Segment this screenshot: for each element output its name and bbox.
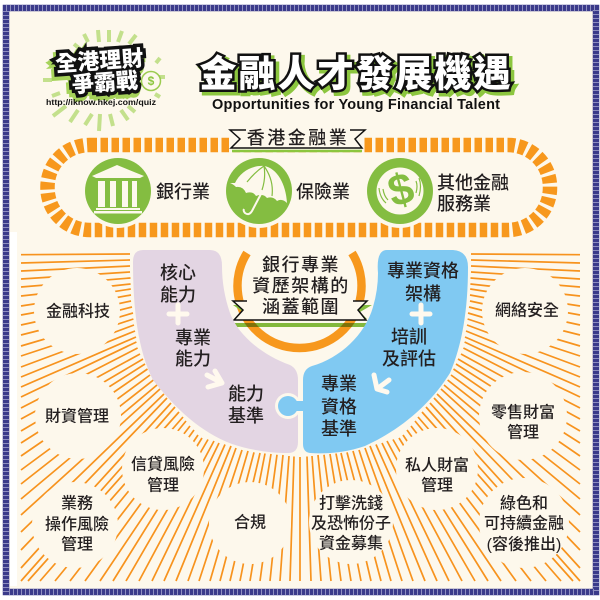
text: qualification framework: 架構 <box>405 284 441 304</box>
topic: AML and CFT <box>311 494 391 552</box>
icon: plus <box>412 305 430 323</box>
text: qualification framework <box>387 261 459 304</box>
topic: AML and CFT: 及恐怖份子 <box>311 514 391 532</box>
text: qualification framework: 專業資格 <box>387 261 459 281</box>
central heading: 涵蓋範圍 <box>262 297 340 317</box>
topic: credit risk <box>131 456 195 494</box>
text: training and assessment <box>382 327 436 369</box>
logo title <box>53 45 146 102</box>
topic: private wealth: 私人財富 <box>405 456 469 474</box>
sunburst rays <box>21 254 580 581</box>
central orange arc <box>238 253 362 348</box>
text: professional competency: 專業 <box>175 328 211 348</box>
topic circles backdrop <box>32 268 569 568</box>
icon: dollar <box>363 154 437 228</box>
subtitle: Opportunities for Young Financial Talent <box>212 97 500 113</box>
topic: green finance: 綠色和 <box>500 494 548 512</box>
topic: green finance <box>484 494 564 554</box>
panel: qualification <box>275 250 468 453</box>
topic: compliance: 合規 <box>234 514 266 532</box>
topic: operational risk: 管理 <box>61 534 93 554</box>
text: training and assessment: 及評估 <box>382 349 436 369</box>
logo bulb with dollar: $ <box>148 74 155 88</box>
text: professional competency <box>175 328 211 369</box>
logo title: 全港理財 <box>55 45 144 77</box>
banner: Hong Kong financial industry <box>230 126 365 151</box>
central ribbon <box>233 301 372 327</box>
arrow <box>207 371 222 387</box>
title: 金融人才發展機遇 <box>200 54 510 94</box>
orange dashed pill <box>48 145 550 230</box>
topic: AML and CFT: 資金募集 <box>319 534 383 552</box>
central heading: 銀行專業 <box>262 255 340 275</box>
logo title: 全港理財 <box>55 45 144 77</box>
topic: cybersecurity: 網絡安全 <box>495 300 559 320</box>
topic: retail wealth <box>491 402 555 442</box>
label: other financial services <box>437 173 509 214</box>
text: qualification standards <box>321 374 357 439</box>
label: other financial services: 其他金融 <box>437 173 509 193</box>
banner: Hong Kong financial industry: 香港金融業 <box>247 128 349 148</box>
logo: quiz badge <box>43 30 165 131</box>
logo sun rays <box>43 30 165 131</box>
central heading: 資歷架構的 <box>252 276 350 296</box>
label: banking: 銀行業 <box>156 182 210 202</box>
topic: operational risk <box>45 494 109 554</box>
logo title: 爭霸戰 <box>69 71 137 101</box>
topic: private wealth <box>405 456 469 494</box>
logo title: 全港理財 <box>53 49 142 80</box>
text: qualification standards: 專業 <box>321 374 357 394</box>
puzzle knob <box>275 393 304 419</box>
text: qualification standards: 資格 <box>321 397 357 417</box>
icon: bank <box>81 154 155 228</box>
topic: green finance: 可持續金融 <box>484 514 564 532</box>
topic: treasury: 財資管理 <box>45 406 109 426</box>
text: core competency: 能力 <box>160 285 196 305</box>
topic: retail wealth: 管理 <box>507 422 539 442</box>
text: core competency <box>160 263 196 305</box>
central heading <box>252 255 350 317</box>
icon: dollar: $ <box>383 163 419 217</box>
label: insurance: 保險業 <box>296 182 350 202</box>
text: competency standards: 能力 <box>228 384 264 404</box>
topic: green finance: (容後推出) <box>487 534 561 554</box>
text: training and assessment: 培訓 <box>391 327 427 347</box>
icon: umbrella <box>222 154 296 228</box>
title: 金融人才發展機遇 <box>200 54 510 94</box>
logo title: 爭霸戰 <box>71 68 139 97</box>
logo title: 爭霸戰 <box>71 68 139 97</box>
text: competency standards: 基準 <box>228 406 264 426</box>
icon: plus <box>169 305 187 323</box>
white strip at lower left <box>10 232 17 586</box>
text: competency standards <box>228 384 264 426</box>
topic: fintech: 金融科技 <box>46 302 110 320</box>
arrow <box>374 375 389 392</box>
logo url: http://iknow.hkej.com/quiz <box>46 97 156 107</box>
topic: operational risk: 業務 <box>61 494 93 512</box>
topic: credit risk: 管理 <box>147 476 179 494</box>
topic: operational risk: 操作風險 <box>45 516 109 534</box>
topic: private wealth: 管理 <box>421 476 453 494</box>
text: core competency: 核心 <box>160 263 196 283</box>
title: 金融人才發展機遇 <box>202 56 514 98</box>
label: other financial services: 服務業 <box>437 194 491 214</box>
text: qualification standards: 基準 <box>321 419 357 439</box>
panel: competency <box>133 250 298 453</box>
topic: AML and CFT: 打擊洗錢 <box>319 494 383 512</box>
topic: retail wealth: 零售財富 <box>491 402 555 422</box>
topic: credit risk: 信貸風險 <box>131 456 195 474</box>
text: professional competency: 能力 <box>175 349 211 369</box>
